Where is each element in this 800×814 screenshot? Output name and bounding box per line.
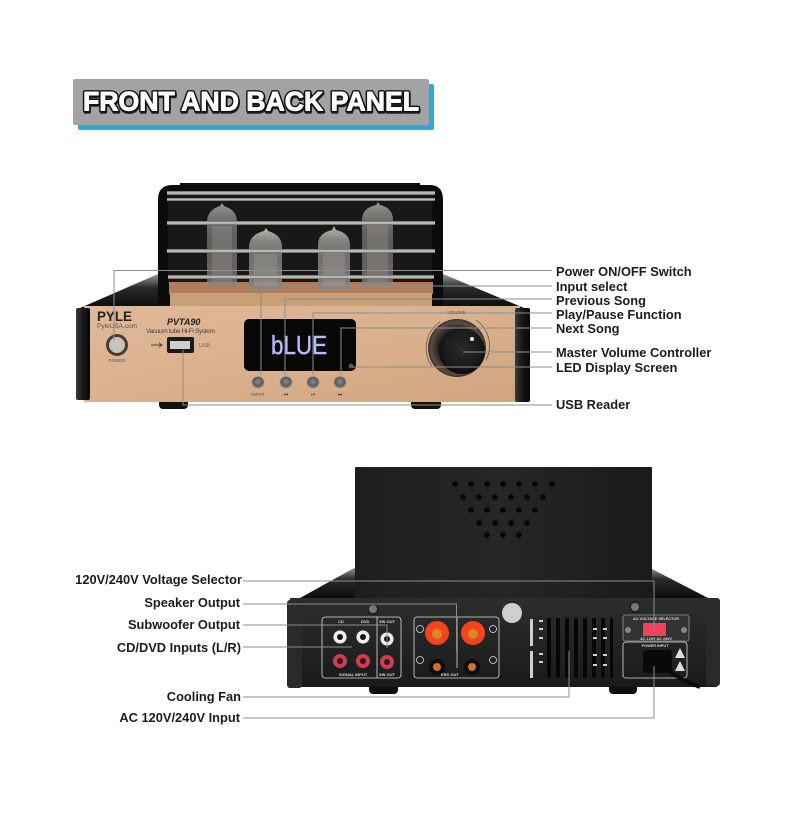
title: FRONT AND BACK PANEL <box>83 86 419 116</box>
banner grey plate <box>73 79 429 125</box>
cooling vents <box>530 618 613 678</box>
LED display <box>244 319 356 371</box>
power button <box>106 334 128 363</box>
speaker output section <box>414 617 499 678</box>
cage bars <box>167 191 435 279</box>
back labels <box>75 572 242 725</box>
power input: POWER INPUT <box>642 644 669 648</box>
control buttons: ⏭ <box>338 392 343 398</box>
model label: PVTA90 <box>167 317 200 327</box>
power input <box>623 642 700 687</box>
wooden base <box>169 282 433 294</box>
label: previous song: Previous Song <box>556 293 646 308</box>
model label <box>146 317 216 335</box>
left end cap <box>287 600 302 688</box>
label: LED screen: LED Display Screen <box>556 360 678 375</box>
signal input section: SW OUT <box>379 672 396 677</box>
control buttons: ⏮ <box>284 392 289 398</box>
LED display: bLUE <box>271 330 327 360</box>
label: voltage selector: 120V/240V Voltage Selector <box>75 572 242 587</box>
back callout lines <box>243 581 654 718</box>
power button: POWER <box>108 358 126 363</box>
control buttons <box>251 376 346 398</box>
feet <box>159 398 441 409</box>
sticker <box>502 603 522 623</box>
label: subwoofer output: Subwoofer Output <box>128 617 241 632</box>
vacuum tubes <box>207 202 393 290</box>
banner blue shadow <box>78 84 434 130</box>
AC voltage selector: AC 120V AC 240V <box>640 637 672 641</box>
rear panel <box>290 598 717 687</box>
label: power switch: Power ON/OFF Switch <box>556 264 692 279</box>
control buttons: ⏯ <box>311 392 315 398</box>
AC voltage selector: AC VOLTAGE SELECTOR <box>633 617 679 621</box>
speaker output section: ERS OUT <box>441 672 459 677</box>
brand logo <box>97 308 137 330</box>
signal input section <box>322 617 401 678</box>
front view amplifier <box>76 183 530 409</box>
brand logo: PYLE <box>97 308 132 324</box>
front labels <box>556 264 711 412</box>
right end cap <box>515 308 530 402</box>
label: master volume: Master Volume Controller <box>556 345 711 360</box>
ventilation holes <box>452 481 555 538</box>
label: play pause: Play/Pause Function <box>556 307 682 322</box>
label: cooling fan: Cooling Fan <box>167 689 241 704</box>
AC voltage selector <box>623 615 689 641</box>
label: speaker output: Speaker Output <box>144 595 241 610</box>
tube cover box <box>355 467 652 598</box>
label: USB reader: USB Reader <box>556 397 630 412</box>
USB port: USB <box>199 343 211 349</box>
label: next song: Next Song <box>556 321 620 336</box>
label: CD DVD inputs: CD/DVD Inputs (L/R) <box>117 640 241 655</box>
signal input section: SW OUT <box>379 619 396 624</box>
brand logo: PyleUSA.com <box>97 323 137 330</box>
title banner <box>73 79 434 130</box>
control buttons: INPUT <box>251 392 265 397</box>
chassis top surface <box>80 274 524 308</box>
label: AC input: AC 120V/240V Input <box>119 710 241 725</box>
signal input section: SIGNAL INPUT <box>339 672 368 677</box>
gold front panel <box>84 306 520 402</box>
signal input section: CD <box>338 619 344 624</box>
right end cap <box>706 598 720 686</box>
screws <box>368 602 640 614</box>
front callout lines <box>114 270 552 405</box>
feet <box>369 684 637 694</box>
volume knob: VOLUME <box>446 310 466 315</box>
title: FRONT AND BACK PANEL <box>84 88 419 118</box>
left end cap <box>76 308 90 400</box>
back view amplifier <box>287 467 720 694</box>
chassis top surface <box>300 567 708 598</box>
title: FRONT AND BACK PANEL <box>83 86 419 116</box>
model label: Vacuum tube Hi-Fi System <box>146 328 216 335</box>
volume knob <box>426 310 490 377</box>
label: input select: Input select <box>556 279 628 294</box>
USB port <box>151 337 211 353</box>
tube cage <box>158 183 443 306</box>
signal input section: DVD <box>361 619 370 624</box>
